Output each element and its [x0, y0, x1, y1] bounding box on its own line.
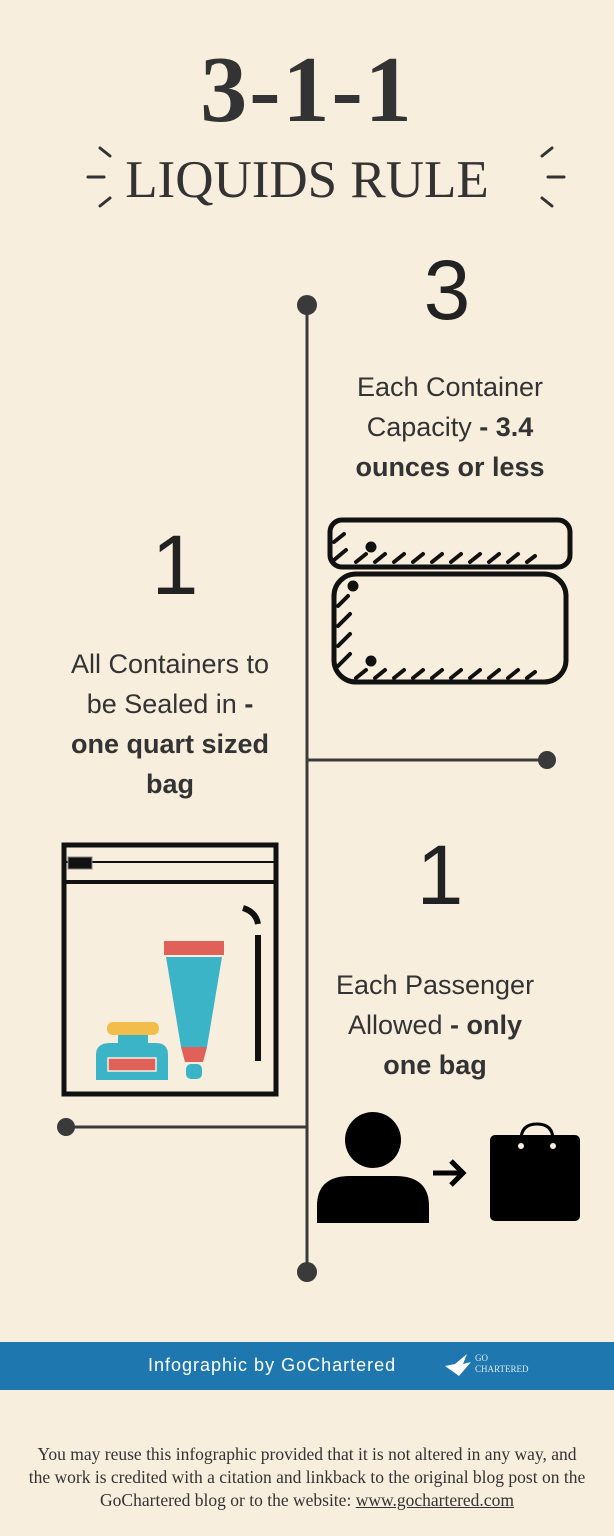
text: quart bag: All Containers to be Sealed in - one quart sized bag	[71, 649, 269, 799]
subtitle: LIQUIDS RULE	[125, 151, 489, 209]
text: one bag: Each Passenger Allowed - only one bag	[336, 970, 534, 1080]
logo: CHARTERED	[475, 1364, 528, 1374]
icon: person to bag	[317, 1112, 580, 1223]
icon: container	[328, 518, 572, 684]
subtitle	[86, 146, 566, 209]
footer note	[28, 1444, 585, 1510]
footer band	[0, 1342, 614, 1390]
number 3: 3	[424, 243, 470, 337]
number 1 left: 1	[152, 518, 198, 612]
footer note: the work is credited with a citation and linkback to the original blog post on the	[29, 1467, 585, 1487]
footer note: GoChartered blog or to the website: www.gochartered.com	[100, 1490, 514, 1510]
title: 3-1-1	[200, 38, 414, 142]
text: container capacity: Each Container Capacity - 3.4 ounces or less	[355, 372, 545, 482]
footer note: You may reuse this infographic provided that it is not altered in any way, and	[38, 1444, 576, 1464]
logo: GO	[475, 1353, 488, 1363]
logo	[445, 1353, 528, 1376]
footer credit text: Infographic by GoChartered	[148, 1355, 396, 1375]
number 1 right: 1	[417, 828, 463, 922]
icon: bag with toiletries	[62, 842, 278, 1096]
